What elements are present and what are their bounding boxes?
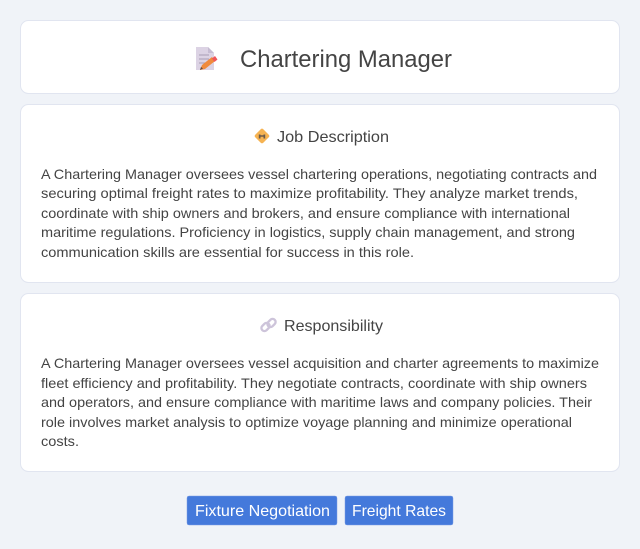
text block: job description: maritime regulations. Proficiency in logistics, supply chain management, and strong — [41, 224, 575, 240]
icon: diamond sign — [254, 128, 270, 144]
text block: responsibility: A Chartering Manager oversees vessel acquisition and charter agreements to maximize — [41, 355, 599, 371]
icon: chain link — [260, 318, 277, 332]
text block: job description: communication skills are essential for success in this role. — [41, 244, 414, 260]
text block: responsibility — [41, 355, 599, 449]
heading: responsibility: Responsibility — [284, 318, 383, 335]
panel: job description — [20, 104, 620, 282]
tag: freight rates: Freight Rates — [352, 503, 446, 520]
icon: document with pencil — [196, 47, 218, 70]
heading: job description: Job Description — [277, 129, 389, 146]
tag: freight rates — [345, 496, 453, 525]
panel: title card — [20, 20, 620, 94]
title: Chartering Manager — [240, 46, 452, 73]
text block: job description: securing optimal freight rates to maximize profitability. They analyze market trends, — [41, 185, 578, 201]
text block: job description: A Chartering Manager oversees vessel chartering operations, negotiating contracts and — [41, 166, 597, 182]
text block: responsibility: role involves market analysis to optimize voyage planning and minimize operational — [41, 414, 572, 430]
text block: responsibility: and operators, and ensure compliance with maritime laws and company policies. Their — [41, 394, 592, 410]
panel: responsibility — [20, 294, 620, 472]
text block: responsibility: costs. — [41, 433, 79, 449]
text block: job description — [41, 166, 597, 260]
text block: responsibility: fleet efficiency and profitability. They negotiate contracts, coordinate with ship owners — [41, 375, 587, 391]
tag: fixture negotiation: Fixture Negotiation — [195, 503, 330, 520]
tag: fixture negotiation — [187, 496, 337, 525]
text block: job description: coordinate with ship owners and brokers, and ensure compliance with international — [41, 205, 570, 221]
